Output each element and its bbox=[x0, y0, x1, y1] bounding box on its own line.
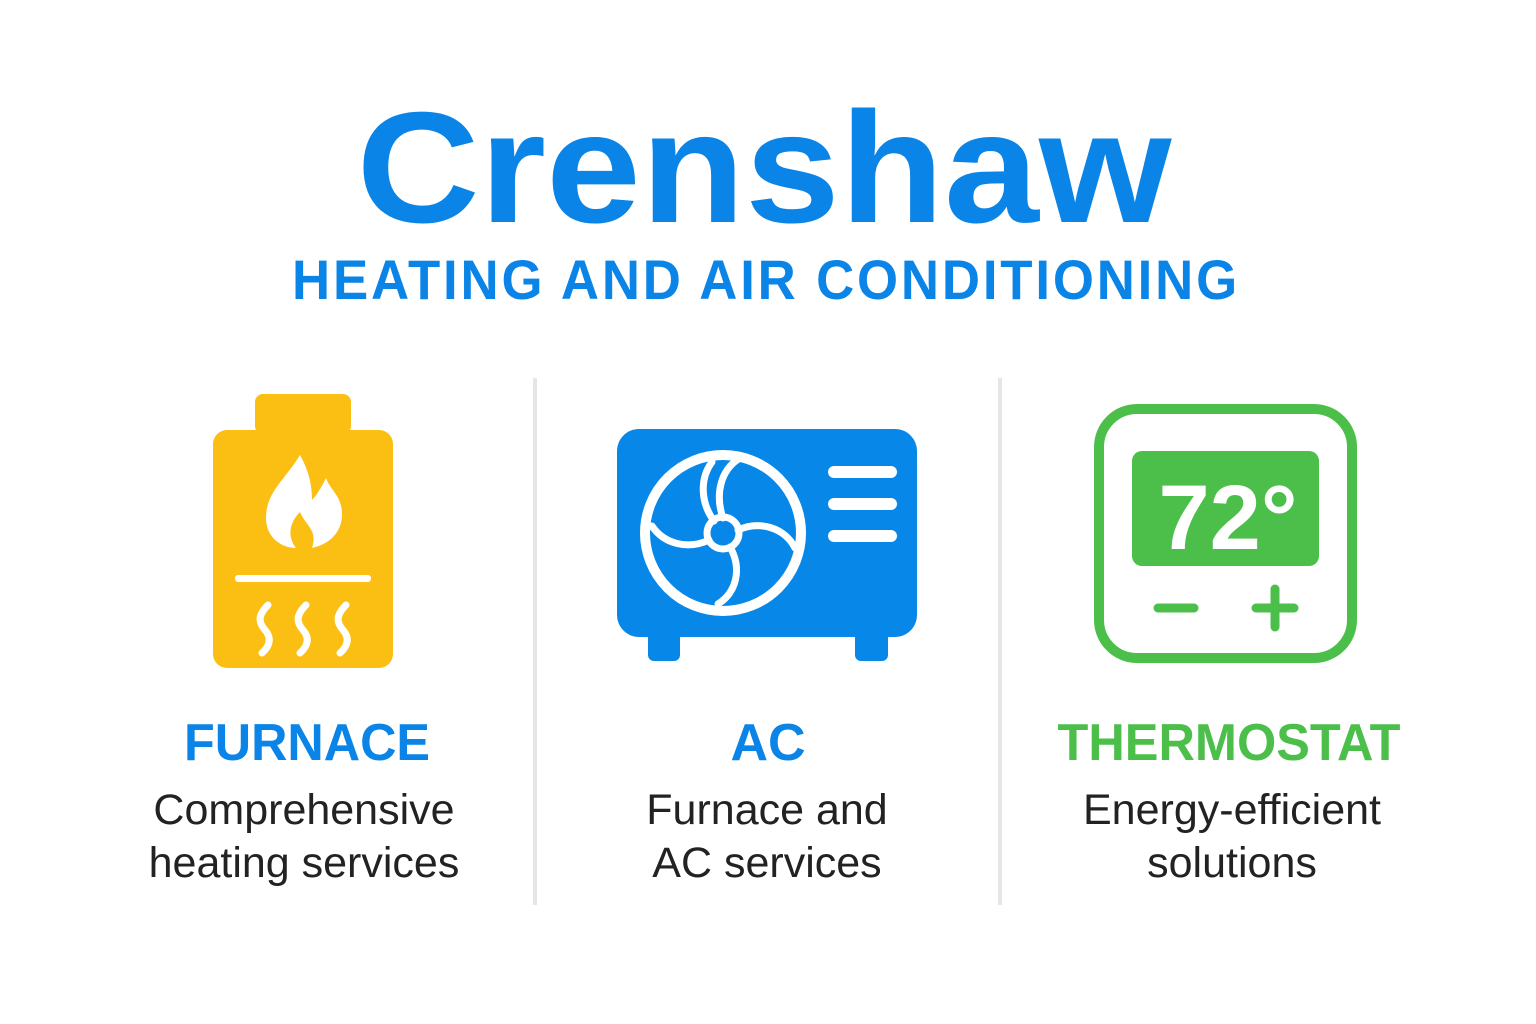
heading: thermostat: THERMOSTAT bbox=[1058, 714, 1401, 772]
icon: furnace bbox=[213, 394, 393, 668]
title: Crenshaw bbox=[356, 80, 1173, 256]
icon: thermostat bbox=[1099, 409, 1352, 658]
text: furnace description: Comprehensive bbox=[153, 786, 455, 834]
icon: thermostat: 72° bbox=[1158, 467, 1298, 569]
subtitle: HEATING AND AIR CONDITIONING bbox=[292, 248, 1240, 311]
text: thermostat description: solutions bbox=[1147, 839, 1317, 887]
text: ac description: Furnace and bbox=[646, 786, 888, 834]
panel: ac bbox=[617, 429, 917, 887]
heading: furnace: FURNACE bbox=[184, 714, 430, 772]
text: thermostat description: Energy-efficient bbox=[1083, 786, 1381, 834]
text: furnace description: heating services bbox=[149, 839, 459, 887]
icon: ac unit bbox=[617, 429, 917, 661]
panel: thermostat bbox=[1058, 409, 1401, 887]
text: ac description: AC services bbox=[652, 839, 882, 887]
heading: ac: AC bbox=[730, 714, 806, 772]
panel: furnace bbox=[149, 394, 459, 887]
